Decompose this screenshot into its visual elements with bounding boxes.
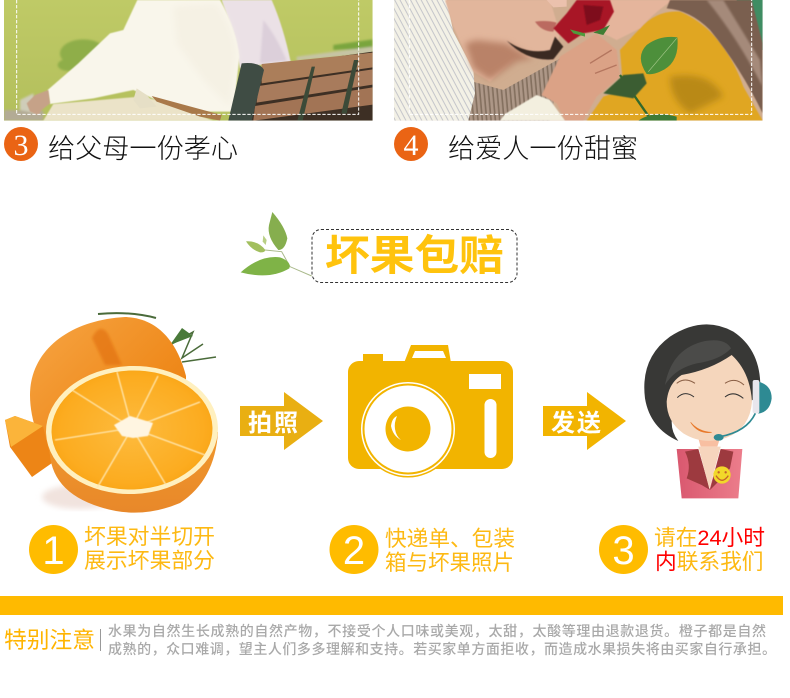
caption: parents: 给父母一份孝心 bbox=[48, 134, 238, 164]
heading: special notice: 特别注意 bbox=[4, 628, 95, 653]
dashed frame bbox=[17, 0, 359, 114]
rose bbox=[553, 0, 614, 43]
jacket bbox=[677, 449, 742, 498]
step 3: 请在24小时 bbox=[654, 525, 765, 550]
step 2: 快递单、包装 bbox=[385, 526, 515, 551]
dashed frame bbox=[409, 0, 752, 114]
headset mic bbox=[720, 413, 755, 437]
step 1: 展示坏果部分 bbox=[84, 548, 215, 573]
wedge bbox=[5, 416, 52, 477]
arrow: send: 发送 bbox=[551, 410, 601, 437]
title: bad fruit compensation: 坏果包赔 bbox=[325, 232, 504, 279]
bench slats bbox=[228, 52, 373, 121]
neck bbox=[698, 438, 720, 447]
step 1 bbox=[29, 524, 215, 574]
hair back bbox=[644, 324, 760, 441]
half orange face bbox=[44, 363, 220, 497]
step 3: 内联系我们 bbox=[655, 549, 763, 574]
girl's hair bbox=[667, 0, 763, 113]
icon: leaf sprig bbox=[241, 212, 312, 276]
fringe highlight bbox=[665, 340, 731, 385]
arrow: take photo: 拍照 bbox=[248, 410, 298, 437]
man's shirt bbox=[48, 0, 239, 112]
step 2: 箱与坏果照片 bbox=[385, 550, 514, 575]
whole orange bbox=[30, 317, 186, 470]
illustration: oranges bbox=[5, 313, 220, 513]
bush bbox=[57, 38, 100, 72]
man's shirt bbox=[394, 0, 475, 121]
icon: camera bbox=[348, 345, 513, 478]
second person bbox=[222, 0, 291, 68]
background bbox=[737, 0, 763, 50]
yellow band bbox=[0, 596, 783, 615]
badge 3 bbox=[4, 127, 38, 162]
badge 4 bbox=[394, 127, 428, 162]
step 1: 坏果对半切开 bbox=[84, 524, 215, 549]
beard bbox=[507, 37, 563, 60]
girl's skin bbox=[603, 0, 673, 40]
photo: couple with a rose bbox=[394, 0, 763, 121]
hand bbox=[27, 90, 50, 115]
badge 3: 3 bbox=[14, 129, 28, 162]
leaf bbox=[641, 37, 678, 74]
belt bbox=[152, 96, 222, 121]
man's face and neck bbox=[445, 0, 560, 82]
brows and eyes bbox=[677, 380, 695, 383]
face bbox=[667, 355, 752, 441]
step 3 bbox=[599, 525, 765, 574]
step 1: 1 bbox=[42, 529, 65, 573]
photo: elderly parents on a bench bbox=[4, 0, 373, 121]
smile badge bbox=[713, 466, 731, 484]
sweater bbox=[587, 12, 763, 121]
headset earcup bbox=[758, 382, 772, 414]
step 2 bbox=[330, 525, 515, 575]
step 3: 3 bbox=[612, 529, 635, 573]
step 2: 2 bbox=[343, 529, 365, 573]
stem and leaves bbox=[98, 313, 216, 362]
notice text: 水果为自然生长成熟的自然产物，不接受个人口味或美观，太甜，太酸等理由退款退货。橙子都是自然 bbox=[108, 623, 766, 639]
notice text bbox=[108, 623, 776, 657]
man's trousers bbox=[43, 97, 213, 121]
arrow: take photo bbox=[240, 392, 323, 450]
man's chest bbox=[457, 57, 563, 121]
mouth bbox=[691, 422, 712, 433]
arrow: send bbox=[543, 392, 626, 450]
caption: lover: 给爱人一份甜蜜 bbox=[448, 134, 638, 164]
cuff bbox=[500, 95, 565, 121]
illustration: customer service agent bbox=[644, 324, 772, 498]
stem bbox=[620, 75, 650, 118]
badge 4: 4 bbox=[404, 129, 418, 162]
half orange rind bbox=[50, 420, 218, 513]
hand bbox=[542, 33, 620, 121]
notice text: 成熟的，众口难调，望主人们多多理解和支持。若买家单方面拒收，而造成水果损失将由买家自行承担。 bbox=[108, 641, 776, 657]
